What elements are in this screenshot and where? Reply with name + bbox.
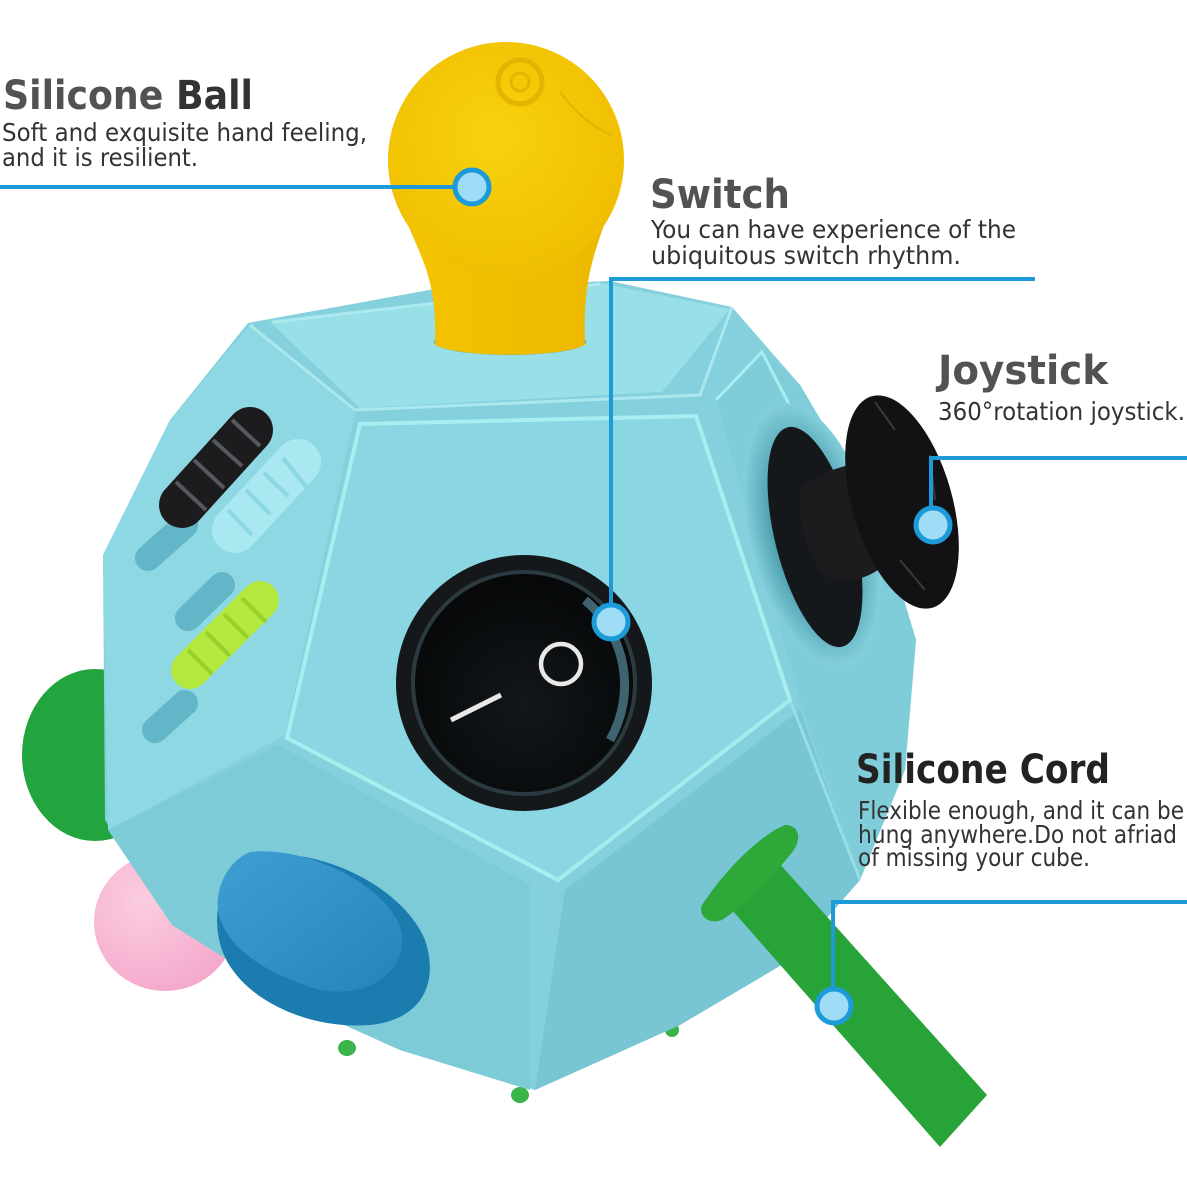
callout: joystick [916, 348, 1187, 542]
icon: yellow silicone ball [388, 42, 624, 355]
callout: silicone cord: Silicone Cord [856, 747, 1110, 793]
callout: silicone ball: Silicone Ball [3, 73, 253, 119]
slider tracks [148, 525, 222, 730]
icon: back pink ball [94, 853, 236, 991]
icon: blue button [217, 851, 430, 1026]
icon: slider lime [188, 598, 266, 674]
central face [287, 416, 790, 880]
top face [270, 283, 730, 408]
lower-right face [535, 710, 860, 1090]
icon: rocker switch [396, 555, 652, 811]
callout: switch: ubiquitous switch rhythm. [651, 241, 961, 270]
icon: green silicone cord [701, 825, 987, 1147]
callout: silicone ball: and it is resilient. [2, 143, 198, 172]
callout: silicone cord: of missing your cube. [858, 843, 1090, 872]
callout: switch: Switch [650, 172, 790, 218]
callout: switch: You can have experience of the [650, 215, 1016, 244]
callout: silicone cord [817, 747, 1187, 1023]
icon: joystick [719, 382, 980, 681]
left face [103, 325, 355, 830]
callout: silicone ball: Soft and exquisite hand feeling, [2, 118, 367, 147]
callout: silicone ball [0, 73, 489, 204]
callout: switch [594, 172, 1035, 639]
icon: slider black [176, 420, 260, 510]
callout: joystick: Joystick [935, 348, 1109, 394]
edges [250, 284, 732, 410]
icon: slider light blue [228, 458, 307, 535]
icon: back green ball [22, 669, 168, 841]
lower-left face [108, 745, 530, 1090]
dodecahedron cube body [103, 281, 916, 1090]
bottom feet [338, 1023, 679, 1103]
right face [716, 352, 916, 880]
